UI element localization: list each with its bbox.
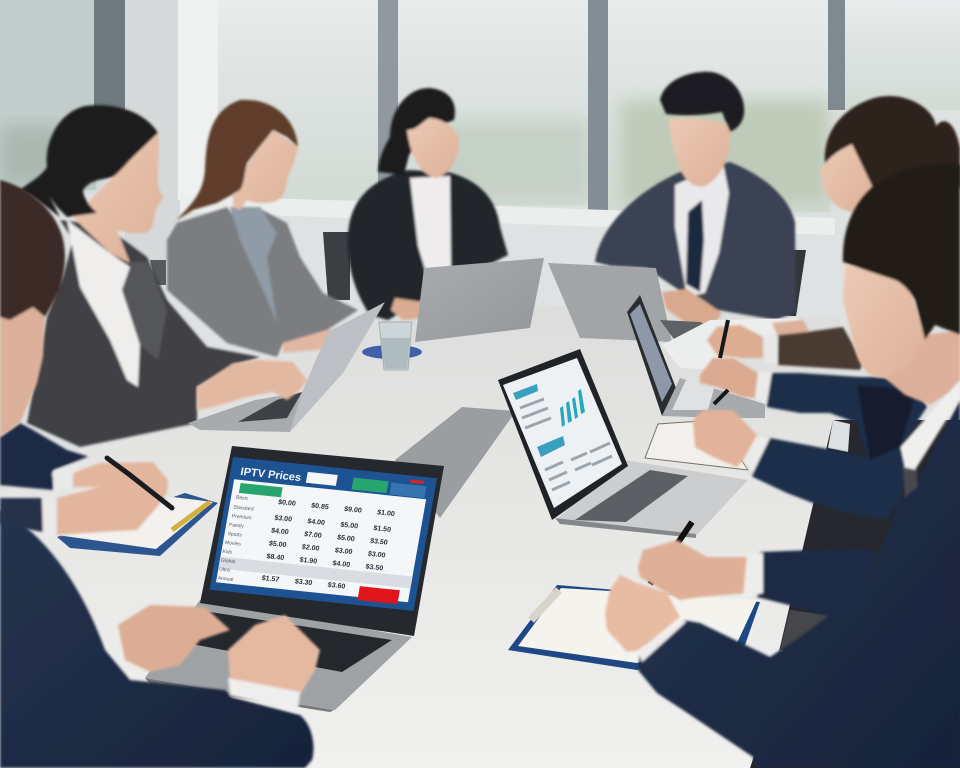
price table text: $3.30: [294, 578, 313, 587]
row labels: Basic: [235, 495, 249, 502]
laptop: IPTV Prices, front left: [145, 446, 444, 712]
price table text: $1.50: [373, 525, 392, 534]
notebook behind right hands: [645, 420, 748, 470]
blue label: [513, 384, 538, 400]
notebook at left: [57, 493, 218, 556]
price table text: $3.60: [327, 582, 346, 591]
price table text: [261, 499, 395, 594]
bar chart: [560, 389, 585, 427]
price table text: $4.00: [307, 518, 326, 527]
chair behind meeting: [323, 232, 350, 300]
person: woman with bun at right, sleeve and hand: [707, 96, 960, 370]
person: woman in dark jacket on left: [20, 105, 260, 447]
table top: [0, 300, 840, 768]
price table text: $3.00: [367, 551, 386, 559]
bezel: [498, 349, 628, 520]
laptop: silver open at left: [188, 302, 385, 432]
chair behind second woman: [150, 260, 166, 285]
price table text: $0.00: [278, 499, 296, 508]
price table text: $0.85: [311, 503, 329, 511]
person: man in navy suit at far side: [595, 72, 796, 325]
row labels: Sports: [227, 531, 243, 539]
text lines on screen: [520, 399, 612, 490]
water glass: [379, 322, 412, 370]
person: man in foreground left: [0, 180, 320, 768]
price table text: $5.00: [340, 522, 359, 530]
price table text: $3.50: [365, 564, 384, 572]
person: woman front right: [605, 164, 960, 768]
row labels: Global: [220, 558, 236, 565]
far paper: [662, 318, 800, 370]
person: woman in grey jacket with brown hair: [167, 100, 360, 357]
price table text: $3.00: [274, 515, 293, 524]
price table text: $5.00: [336, 534, 355, 543]
blue folder under glass: [362, 345, 422, 359]
base: [558, 460, 748, 537]
price table text: $4.00: [332, 560, 351, 569]
chair right: [782, 250, 806, 316]
price table text: $2.00: [301, 544, 320, 553]
person: front left writing hand and sleeve: [0, 423, 168, 535]
price table text: $3.50: [369, 538, 388, 547]
buy button: [357, 586, 400, 604]
laptop base: far right: [660, 320, 710, 342]
pen in front hand: [650, 522, 692, 584]
notebook front right: [508, 585, 760, 670]
row labels: Family: [229, 522, 245, 530]
price table text: $1.90: [299, 557, 318, 565]
hand on left laptop: [197, 360, 307, 410]
row labels: Movies: [224, 540, 242, 548]
row labels: Standard: [233, 504, 254, 513]
price table text: $9.00: [344, 506, 362, 515]
price table text: $1.00: [377, 509, 395, 518]
price table text: $8.40: [266, 553, 285, 562]
laptop screen bezel: [200, 446, 444, 636]
price table text: $3.00: [334, 547, 353, 556]
row labels: Premium: [231, 513, 252, 521]
laptop: small, right: [627, 295, 765, 418]
price table text: $1.57: [261, 575, 280, 584]
price table text: $7.00: [303, 531, 322, 540]
person: woman in black jacket at far side: [348, 88, 508, 320]
laptop screen content: [210, 457, 437, 611]
row labels: Ultra: [219, 567, 230, 574]
row labels: [217, 494, 256, 584]
pen in left hand: [107, 458, 172, 508]
laptop lid flat on table: [395, 407, 516, 518]
screen: [503, 358, 622, 508]
laptop: far right lid: [548, 263, 672, 342]
price table text: $4.00: [270, 528, 289, 536]
row labels: Kids: [222, 549, 233, 556]
dark area below the table on the right: [750, 420, 960, 768]
screen heading: IPTV Prices: [240, 466, 302, 484]
laptop: far centre lid: [415, 258, 544, 342]
laptop: dashboard, centre: [498, 349, 748, 538]
pen on right hand: [714, 320, 728, 404]
row labels: Annual: [217, 575, 234, 583]
laptop base with keyboard: [145, 600, 412, 712]
person: middle right sleeves and hands: [693, 358, 927, 520]
price table text: $5.00: [268, 540, 287, 549]
